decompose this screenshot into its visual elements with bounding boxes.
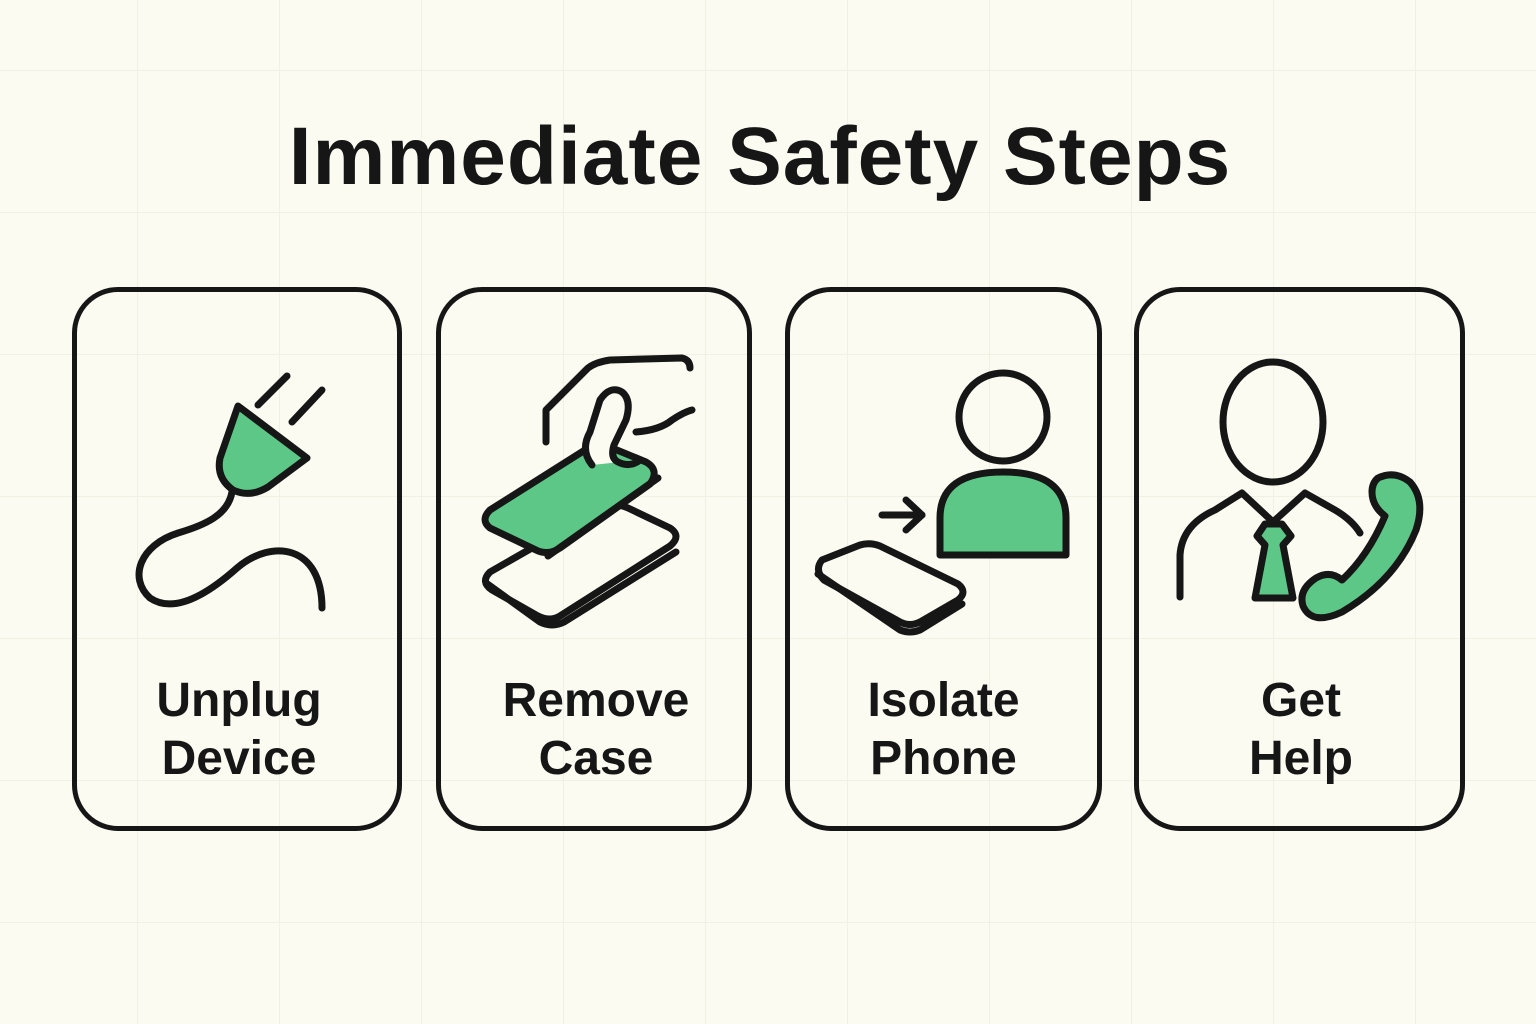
icon: plug xyxy=(139,376,322,608)
panel: get help xyxy=(1134,287,1465,831)
label: get help: Help xyxy=(1249,732,1353,785)
label: isolate phone: Isolate xyxy=(867,674,1020,727)
panel: unplug device xyxy=(72,287,402,831)
title: Immediate Safety Steps xyxy=(289,111,1231,202)
label: unplug device xyxy=(156,674,322,785)
icon: get help xyxy=(1180,362,1420,618)
label: remove case: Case xyxy=(539,732,653,785)
label: isolate phone: Phone xyxy=(870,732,1017,785)
label: get help: Get xyxy=(1261,674,1341,727)
label: remove case xyxy=(503,674,689,785)
panel: remove case xyxy=(436,287,752,831)
label: remove case: Remove xyxy=(503,674,689,727)
panel: isolate phone xyxy=(785,287,1102,831)
label: isolate phone xyxy=(867,674,1020,785)
label: get help xyxy=(1249,674,1353,785)
icon: isolate phone xyxy=(818,373,1066,632)
label: unplug device: Device xyxy=(162,732,316,785)
icon: remove case xyxy=(485,358,692,625)
label: unplug device: Unplug xyxy=(156,674,322,727)
